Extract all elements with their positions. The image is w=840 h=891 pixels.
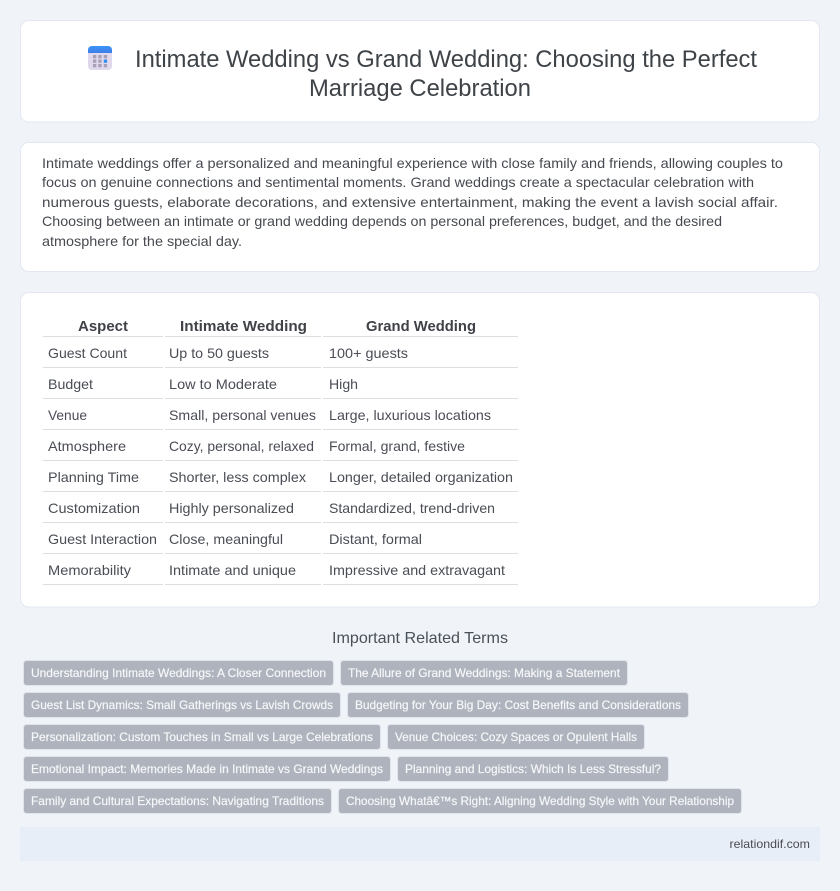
table row: planning time: [48, 469, 513, 485]
table row: venue: Large, luxurious locations: [329, 407, 491, 423]
tag: Guest List Dynamics: Small Gatherings vs Lavish Crowds: [31, 698, 333, 712]
tag: The Allure of Grand Weddings: Making a Statement: [348, 666, 621, 680]
tags: related terms: [24, 660, 742, 814]
table row: atmosphere: [48, 438, 465, 454]
table row: budget: Budget: [48, 376, 93, 392]
tag: Understanding Intimate Weddings: A Closer Connection: [31, 666, 326, 680]
table row: venue: Venue: [48, 407, 87, 423]
tag: [348, 692, 688, 718]
table row: guest interaction: Close, meaningful: [169, 531, 283, 547]
table row: guest interaction: [48, 531, 422, 547]
table header: Aspect: [78, 318, 128, 335]
tag: Budgeting for Your Big Day: Cost Benefits and Considerations: [355, 698, 681, 712]
icon: calendar: [88, 46, 112, 70]
table row: venue: [48, 407, 491, 423]
table header: Grand Wedding: [366, 318, 476, 335]
heading: important related terms: Important Related Terms: [332, 630, 508, 647]
table row: memorability: Memorability: [48, 562, 131, 578]
table row: budget: Low to Moderate: [169, 376, 277, 392]
table row: atmosphere: Formal, grand, festive: [329, 438, 465, 454]
table row: venue: Small, personal venues: [169, 407, 316, 423]
text block: summary paragraph: atmosphere for the special day.: [42, 233, 242, 249]
tag: [340, 660, 628, 686]
tag: [24, 692, 340, 718]
title: Intimate Wedding vs Grand Wedding: Choosing the Perfect: [135, 46, 757, 73]
table row: customization: [48, 500, 495, 516]
table row: customization: Standardized, trend-driven: [329, 500, 495, 516]
text block: summary paragraph: Choosing between an intimate or grand wedding depends on personal preferences, budget, and the desired: [42, 213, 722, 229]
table header: [78, 318, 476, 335]
text block: summary paragraph: [42, 155, 783, 249]
table row: guest count: 100+ guests: [329, 345, 408, 361]
text block: summary paragraph: Intimate weddings offer a personalized and meaningful experience with close family and friends, allowing couples to: [42, 155, 783, 171]
table row: guest interaction: Distant, formal: [329, 531, 422, 547]
text block: summary paragraph: numerous guests, elaborate decorations, and extensive entertainment, making the event a lavish social affair.: [42, 194, 778, 210]
footer: relationdif.com: [730, 837, 810, 851]
table row: guest interaction: Guest Interaction: [48, 531, 157, 547]
tag: [24, 660, 334, 686]
title: Marriage Celebration: [309, 75, 531, 102]
tag: Planning and Logistics: Which Is Less Stressful?: [405, 762, 661, 776]
tag: Choosing Whatâ€™s Right: Aligning Wedding Style with Your Relationship: [346, 794, 734, 808]
table row: planning time: Shorter, less complex: [169, 469, 306, 485]
table row: atmosphere: Atmosphere: [48, 438, 126, 454]
tag: Venue Choices: Cozy Spaces or Opulent Halls: [395, 730, 637, 744]
tag: [24, 756, 390, 782]
table row: guest count: Up to 50 guests: [169, 345, 269, 361]
tag: Family and Cultural Expectations: Navigating Traditions: [31, 794, 324, 808]
tag: [388, 724, 644, 750]
table row: memorability: Intimate and unique: [169, 562, 296, 578]
tag: Emotional Impact: Memories Made in Intimate vs Grand Weddings: [31, 762, 383, 776]
table row: atmosphere: Cozy, personal, relaxed: [169, 438, 314, 454]
table row: budget: [48, 376, 358, 392]
table row: memorability: [48, 562, 505, 578]
table row: customization: Highly personalized: [169, 500, 294, 516]
panel: comparison table: [20, 292, 820, 607]
footer: [20, 827, 820, 861]
table row: planning time: Planning Time: [48, 469, 139, 485]
table row: guest count: [48, 345, 408, 361]
table row: guest count: Guest Count: [48, 345, 127, 361]
table header: Intimate Wedding: [180, 318, 307, 335]
table row: memorability: Impressive and extravagant: [329, 562, 505, 578]
tag: Personalization: Custom Touches in Small vs Large Celebrations: [31, 730, 373, 744]
tag: [338, 788, 742, 814]
tag: [24, 788, 332, 814]
text block: summary paragraph: focus on genuine connections and sentimental moments. Grand weddings create a spectacular celebration with: [42, 174, 754, 190]
tag: [24, 724, 380, 750]
table row: customization: Customization: [48, 500, 140, 516]
panel: summary: [20, 142, 820, 272]
table row: planning time: Longer, detailed organization: [329, 469, 513, 485]
tag: [398, 756, 668, 782]
panel: header: [20, 20, 820, 122]
table row: budget: High: [329, 376, 358, 392]
title: [135, 46, 757, 102]
